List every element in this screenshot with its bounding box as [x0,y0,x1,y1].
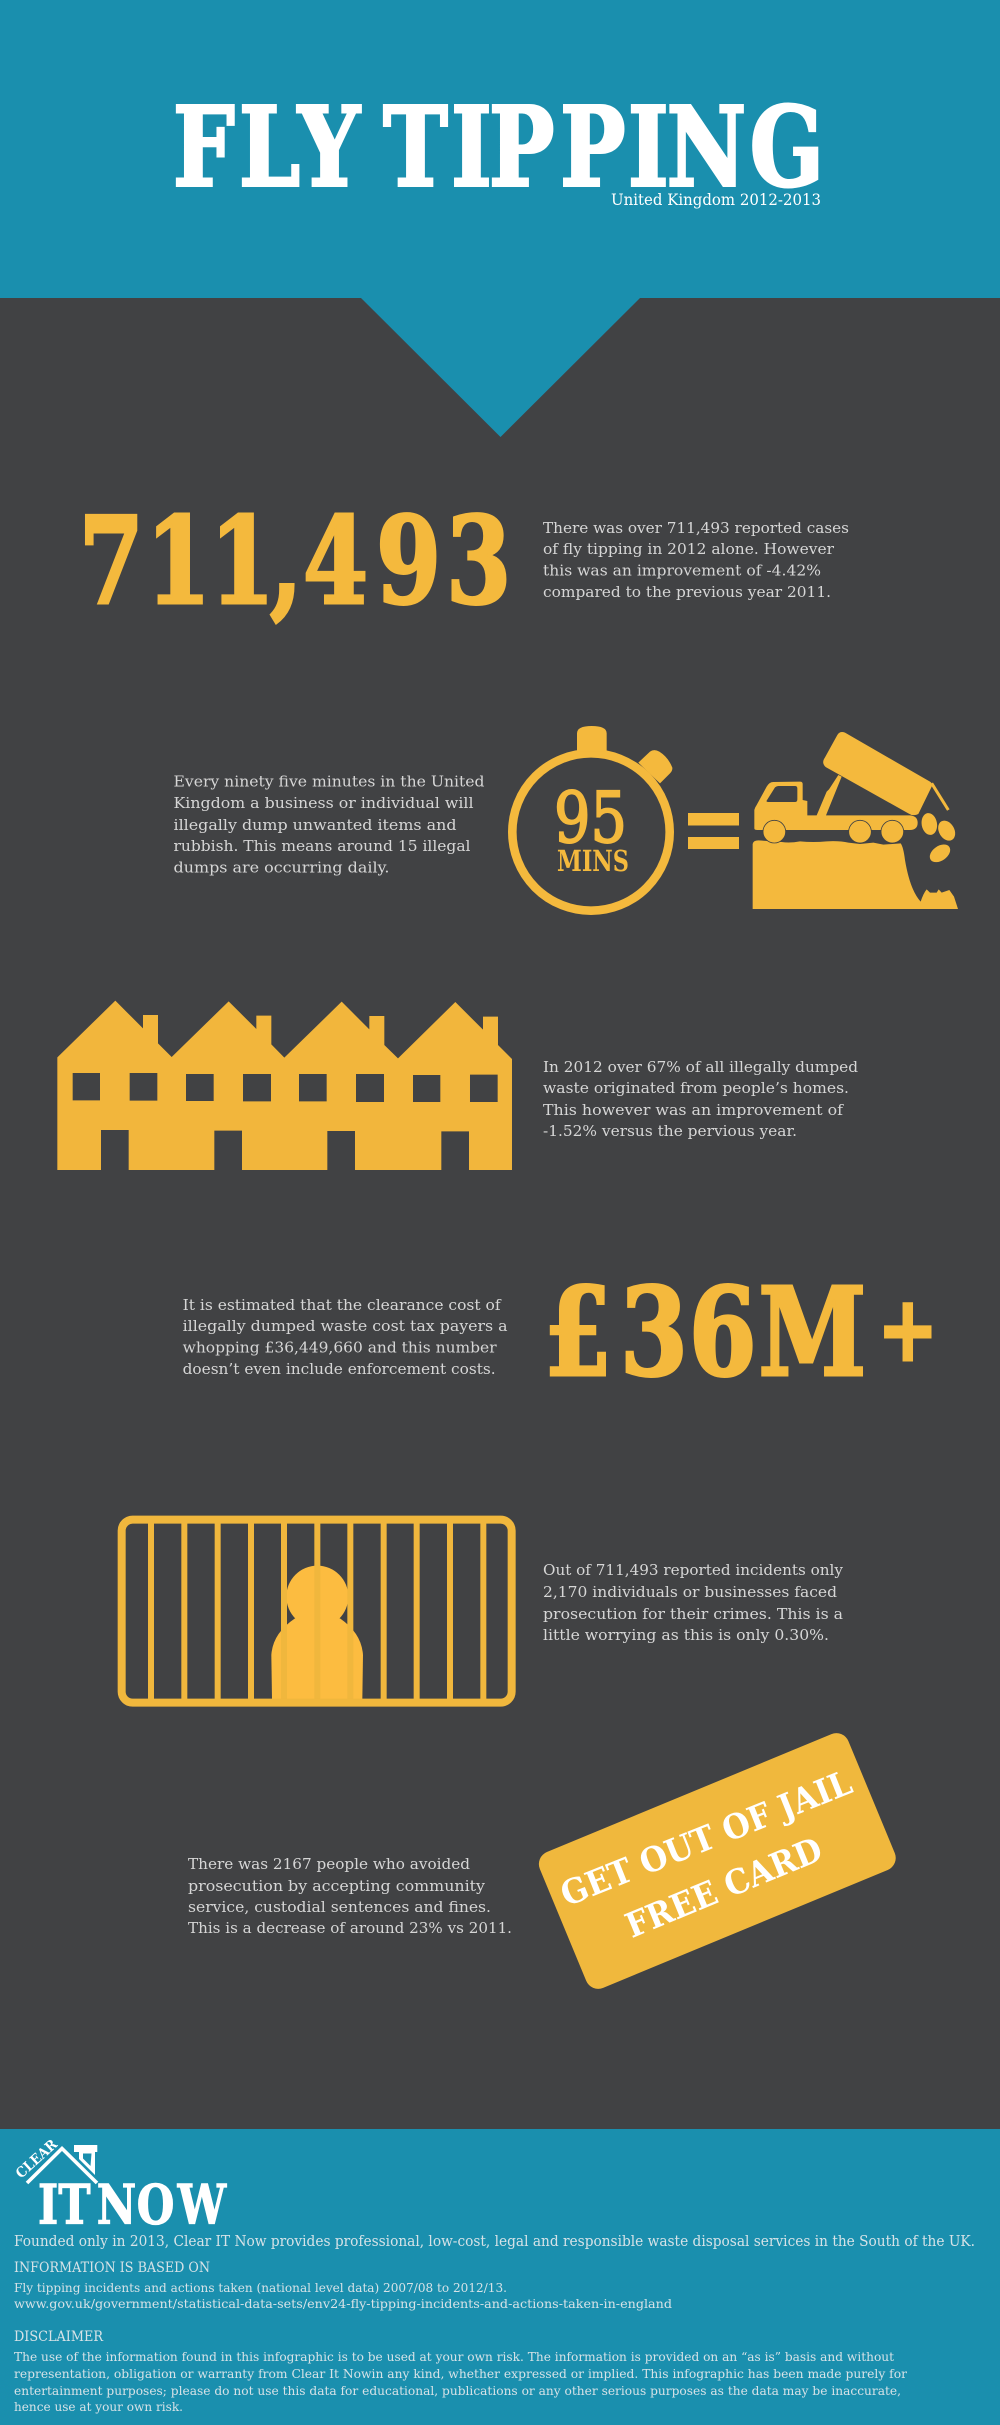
text: data sources: Fly tipping incidents and actions taken (national level data) 2007/08 to 2012/13. [14,2280,507,2295]
title: FLY TIPPING [173,83,824,212]
text: data sources: www.gov.uk/government/statistical-data-sets/env24-fly-tipping-incidents-and-actions-taken-in-england [14,2296,672,2311]
text block: reported cases: There was over 711,493 reported cases [543,519,849,537]
text block: homes [543,1058,858,1140]
text block: avoided prosecution: This is a decrease of around 23% vs 2011. [188,1919,512,1937]
big number: £36M+: £36M [544,1261,866,1405]
text block: avoided prosecution: There was 2167 people who avoided [188,1855,470,1873]
text: disclaimer: representation, obligation or warranty from Clear It Nowin any kind, whether expressed or implied. This infographic has been made purely for [14,2366,907,2381]
text block: reported cases: compared to the previous year 2011. [543,583,831,601]
text: disclaimer [14,2349,907,2414]
text: disclaimer: hence use at your own risk. [14,2399,183,2414]
card: get out of jail free: GET OUT OF JAIL [555,1763,858,1915]
text block: reported cases: this was an improvement of -4.42% [543,562,821,580]
text block: clearance cost: illegally dumped waste cost tax payers a [183,1317,508,1335]
logo: Clear It Now: IT NOW [38,2173,227,2237]
text block: homes: waste originated from people’s homes. [543,1079,849,1097]
big number: 711,493: 711,493 [79,491,511,632]
text block: prosecution [543,1561,844,1644]
big number: £36M+: + [878,1276,938,1382]
text block: prosecution: prosecution for their crimes. This is a [543,1605,843,1623]
subtitle: United Kingdom 2012-2013 [611,190,821,209]
card: get out of jail free: FREE CARD [620,1830,828,1947]
heading: disclaimer: DISCLAIMER [14,2329,103,2345]
text block: homes: This however was an improvement of [543,1101,845,1119]
text block: clearance cost: doesn’t even include enforcement costs. [183,1360,496,1378]
text block: prosecution: little worrying as this is only 0.30%. [543,1626,829,1644]
icon: dump truck tipping rubbish [753,732,959,909]
panel: prosecution [122,1520,844,1703]
text: disclaimer: The use of the information found in this infographic is to be used at your own risk. The information is provided on an “as is” basis and without [14,2349,894,2364]
icon: stopwatch: 95 [554,777,627,859]
text block: clearance cost [183,1296,508,1378]
icon: equals sign [688,813,739,849]
text block: ninety five minutes: Kingdom a business or individual will [174,794,474,812]
text block: clearance cost: It is estimated that the clearance cost of [183,1296,502,1314]
text: data sources [14,2280,672,2311]
text block: prosecution: Out of 711,493 reported incidents only [543,1561,844,1579]
text block: avoided prosecution: prosecution by accepting community [188,1877,486,1895]
logo: Clear It Now [13,2136,227,2237]
text block: avoided prosecution: service, custodial sentences and fines. [188,1898,491,1916]
icon: row of houses [57,1001,512,1170]
text: disclaimer: entertainment purposes; please do not use this data for educational, publications or any other serious purposes as the data may be inaccurate, [14,2383,901,2398]
text block: avoided prosecution [188,1855,512,1937]
logo: Clear It Now: CLEAR [13,2136,61,2182]
icon: person behind bars [122,1520,512,1703]
panel: ninety five minutes [174,726,959,911]
text block: ninety five minutes: illegally dump unwanted items and [174,816,457,834]
text block: prosecution: 2,170 individuals or businesses faced [543,1583,837,1601]
icon: stopwatch: MINS [557,844,629,878]
panel: homes [57,1001,858,1170]
text block: clearance cost: whopping £36,449,660 and this number [183,1339,497,1357]
heading: information is based on: INFORMATION IS BASED ON [14,2260,210,2276]
icon: stopwatch [512,726,672,911]
text block: reported cases: of fly tipping in 2012 alone. However [543,540,835,558]
text block: homes: -1.52% versus the pervious year. [543,1122,797,1140]
text block: reported cases [543,519,849,601]
text block: ninety five minutes: dumps are occurring daily. [174,859,390,877]
panel: clearance cost [183,1261,938,1405]
panel: footer [0,2129,1000,2425]
panel: reported cases [79,491,849,632]
text block: ninety five minutes [174,773,485,877]
card: get out of jail free [535,1729,900,1993]
panel: avoided prosecution [188,1729,900,1993]
text block: ninety five minutes: rubbish. This means around 15 illegal [174,837,471,855]
panel: header banner [0,0,1000,437]
text block: homes: In 2012 over 67% of all illegally dumped [543,1058,858,1076]
text block: ninety five minutes: Every ninety five minutes in the United [174,773,485,791]
